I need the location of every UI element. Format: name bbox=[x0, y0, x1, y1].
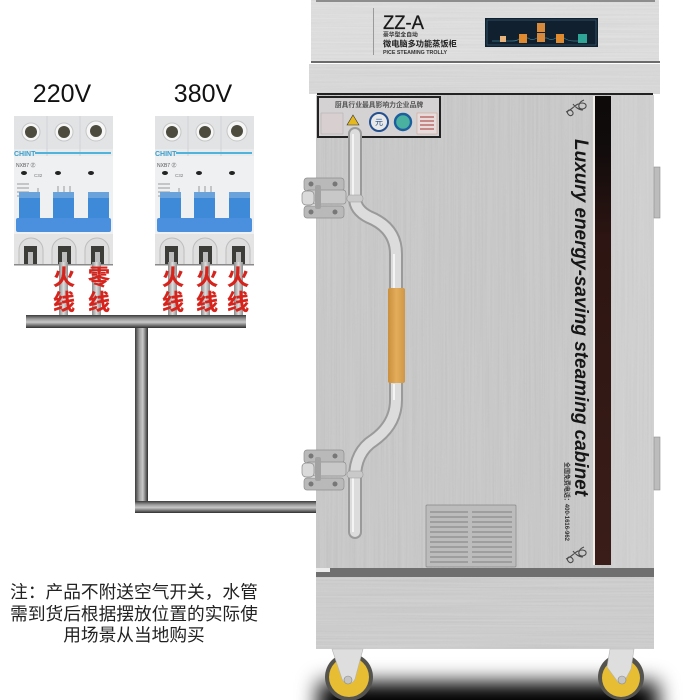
model label ZZ-A: 豪华型全自动 bbox=[383, 30, 418, 38]
wires from breakers to pipe bbox=[59, 262, 243, 317]
digital control panel bbox=[485, 18, 598, 47]
brand certification label: 厨具行业最具影响力企业品牌 bbox=[335, 100, 423, 109]
wire labels: 火 bbox=[196, 265, 218, 290]
wire labels: 火 bbox=[227, 265, 249, 290]
voltage label 220V: 220V bbox=[33, 80, 92, 108]
footnote bbox=[10, 582, 258, 645]
wooden grip bbox=[388, 288, 405, 383]
rotated slogan: Luxury energy-saving steaming cabinet bbox=[570, 139, 592, 497]
wire labels: 线 bbox=[53, 290, 75, 315]
model label ZZ-A: PICE STEAMING TROLLY bbox=[383, 50, 448, 56]
rotated hotline: 全国免费电话：400-1616-962 bbox=[563, 462, 572, 541]
instruction plate bbox=[426, 505, 516, 567]
circuit breaker 220V bbox=[14, 116, 113, 266]
door handle bbox=[347, 134, 405, 532]
wire labels: 火 bbox=[162, 265, 184, 290]
footnote: 注：产品不附送空气开关，水管 bbox=[10, 582, 258, 602]
water pipe connecting breakers to cabinet bbox=[26, 315, 316, 513]
footnote: 用场景从当地购买 bbox=[63, 625, 205, 645]
right-side hinges bbox=[654, 167, 660, 490]
brand certification label bbox=[318, 97, 440, 137]
decorative flourishes bbox=[566, 100, 586, 563]
cabinet shadow on the floor bbox=[318, 682, 658, 700]
wire labels: 零 bbox=[88, 265, 110, 290]
wire labels: 线 bbox=[227, 290, 249, 315]
model label ZZ-A: 微电脑多功能蒸饭柜 bbox=[383, 38, 457, 48]
wire labels: 线 bbox=[162, 290, 184, 315]
cabinet door bbox=[316, 95, 660, 568]
wire labels bbox=[53, 265, 249, 315]
voltage label 380V: 380V bbox=[174, 80, 233, 108]
cabinet cornice band bbox=[309, 64, 660, 95]
right caster wheel bbox=[598, 649, 644, 700]
circuit breaker 380V bbox=[155, 116, 254, 266]
model label ZZ-A: ZZ-A bbox=[383, 13, 424, 34]
footnote: 需到货后根据摆放位置的实际使 bbox=[10, 604, 258, 624]
cabinet top control section bbox=[311, 0, 660, 63]
lower door latch bbox=[302, 450, 346, 490]
steaming cabinet body bbox=[302, 0, 660, 700]
wire labels: 火 bbox=[53, 265, 75, 290]
dark vertical strip bbox=[593, 96, 611, 565]
model label ZZ-A bbox=[383, 13, 457, 56]
wire labels: 线 bbox=[196, 290, 218, 315]
left caster wheel bbox=[325, 649, 373, 700]
brand certification label: 元 bbox=[375, 118, 383, 127]
wire labels: 线 bbox=[88, 290, 110, 315]
upper door latch bbox=[302, 178, 346, 218]
cabinet base bbox=[316, 568, 654, 649]
